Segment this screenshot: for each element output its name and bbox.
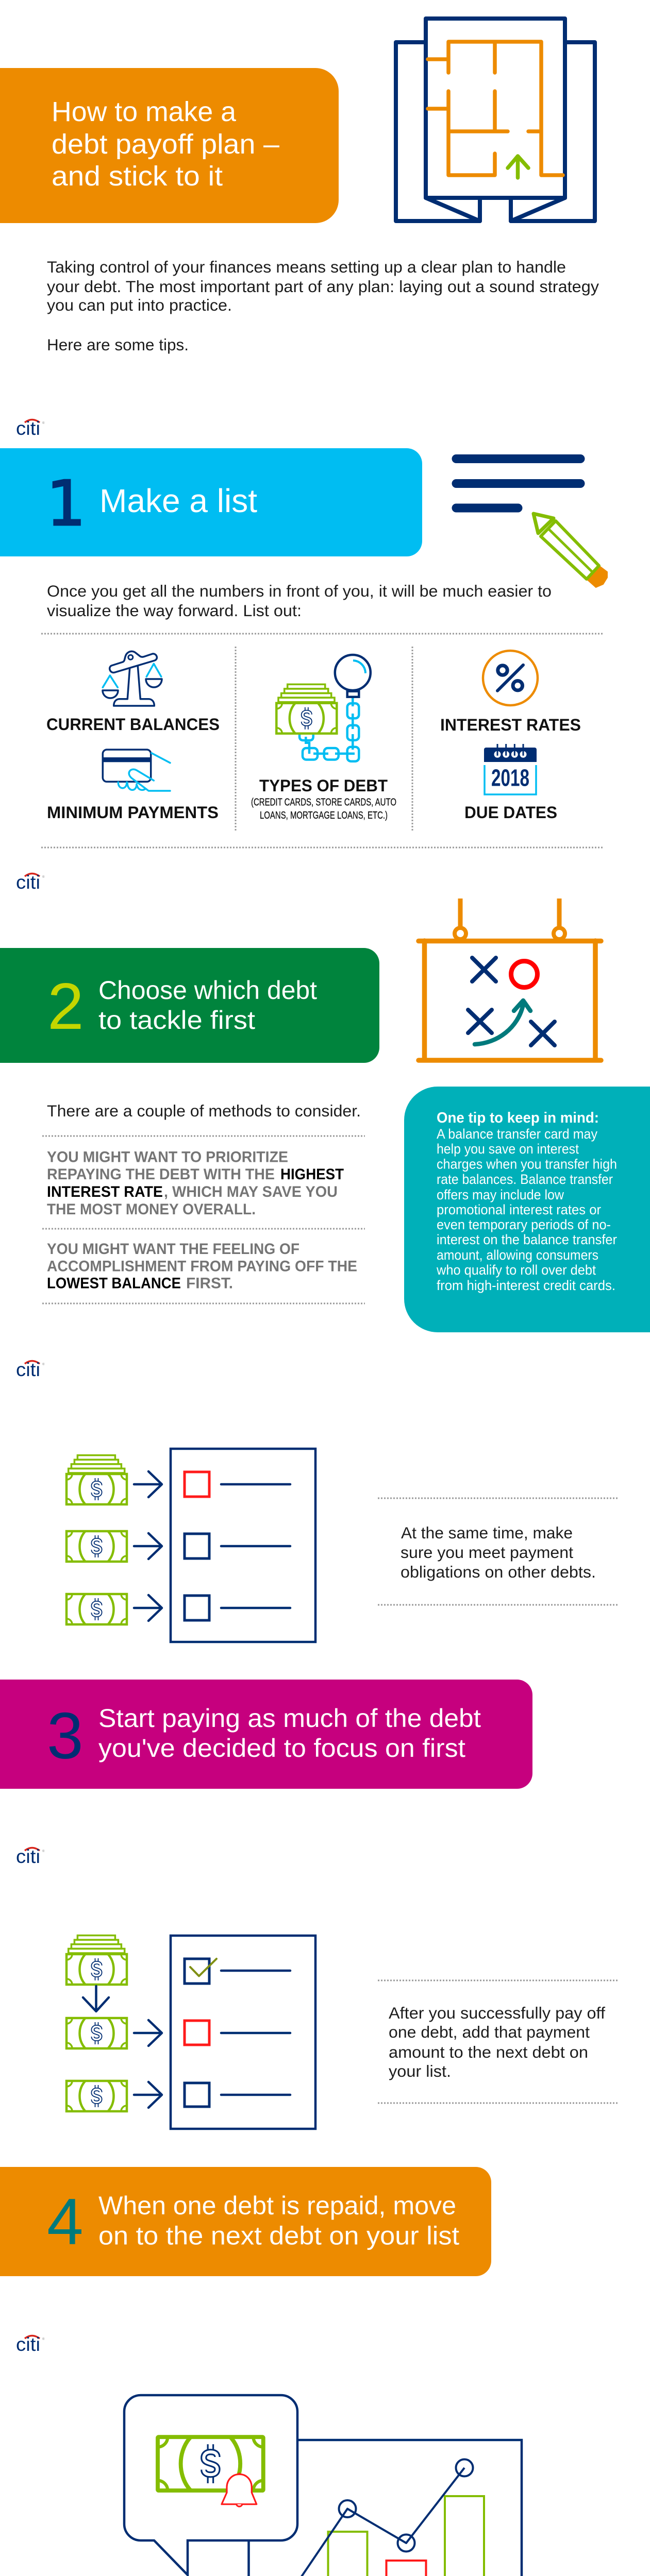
icon: credit card in hand [103, 750, 170, 791]
label: types of debt: TYPES OF DEBT [259, 776, 388, 795]
text: other debts [401, 1523, 596, 1581]
text: other debts: obligations on other debts. [401, 1563, 596, 1581]
trend line [280, 2460, 473, 2576]
intro text: Taking control of your finances means setting up a clear plan to handle [47, 258, 566, 276]
panel: tip to keep in mind [404, 1087, 650, 1332]
text: highest interest rate method: , WHICH MAY SAVE YOU [164, 1183, 338, 1200]
logo: citi: citi [16, 2334, 40, 2355]
text: highest interest rate method: INTEREST RATE [47, 1183, 163, 1200]
icon: chart with reminder bubble [124, 2395, 522, 2576]
text: other debts: At the same time, make [401, 1523, 573, 1542]
section 4 banner: on to the next debt on your list [98, 2222, 459, 2250]
panel: tip to keep in mind: amount, allowing consumers [437, 1247, 598, 1263]
speech bubble [124, 2395, 297, 2575]
label: types of debt: (CREDIT CARDS, STORE CARDS, AUTO [251, 796, 396, 808]
title banner [0, 68, 339, 223]
text: lowest balance method: FIRST. [186, 1275, 233, 1292]
text: add payment to next debt [389, 2004, 605, 2080]
section 2 banner: Choose which debt [98, 976, 317, 1005]
text: add payment to next debt: After you successfully pay off [389, 2004, 605, 2022]
title banner: debt payoff plan – [52, 129, 279, 160]
money bill [65, 1593, 128, 1626]
panel: tip to keep in mind: even temporary periods of no- [437, 1217, 611, 1232]
text: lowest balance method: YOU MIGHT WANT THE FEELING OF [47, 1241, 299, 1258]
section 1 intro text [47, 582, 552, 620]
text: lowest balance method: ACCOMPLISHMENT FROM PAYING OFF THE [47, 1258, 357, 1275]
panel: tip to keep in mind: promotional interest rates or [437, 1202, 601, 1217]
label: current balances: CURRENT BALANCES [46, 715, 220, 734]
panel: tip to keep in mind: who qualify to roll over debt [436, 1262, 596, 1278]
section 3 banner: 3 [47, 1699, 84, 1772]
text: add payment to next debt: one debt, add that payment [389, 2023, 590, 2041]
icon: calendar 2018: 2018 [491, 765, 529, 791]
logo: citi: citi [16, 418, 40, 439]
money bill [156, 2435, 265, 2493]
arrows [83, 1986, 162, 2108]
text: lowest balance method [47, 1241, 357, 1292]
icon: calendar 2018 [484, 744, 537, 794]
intro text [47, 258, 599, 354]
section 2 banner: to tackle first [98, 1006, 255, 1035]
panel: tip to keep in mind: charges when you transfer high [437, 1156, 617, 1172]
logo: citi: ® [42, 421, 45, 425]
money stack [66, 1455, 127, 1510]
text: methods intro: There are a couple of methods to consider. [47, 1101, 361, 1120]
logo: citi: ® [42, 1850, 45, 1853]
intro text: your debt. The most important part of any plan: laying out a sound strategy [47, 277, 599, 296]
section 4 banner: When one debt is repaid, move [98, 2191, 456, 2220]
label: due dates: DUE DATES [464, 803, 557, 822]
panel: tip to keep in mind: A balance transfer card may [437, 1126, 597, 1142]
icon: money chained to ball [276, 655, 371, 761]
money bill [65, 1530, 128, 1563]
logo: citi: citi [16, 872, 40, 893]
text: highest interest rate method: THE MOST MONEY OVERALL. [47, 1201, 256, 1218]
text: highest interest rate method: REPAYING THE DEBT WITH THE [47, 1166, 275, 1183]
section 1 banner: Make a list [99, 482, 257, 519]
label: minimum payments: MINIMUM PAYMENTS [47, 803, 219, 822]
text: highest interest rate method: HIGHEST [280, 1166, 344, 1183]
money stack [66, 1936, 127, 1990]
section 2 banner: 2 [47, 970, 84, 1043]
logo: citi: ® [42, 1363, 45, 1366]
panel: tip to keep in mind: from high-interest credit cards. [437, 1278, 615, 1293]
checklist document [171, 1936, 315, 2129]
label: types of debt: LOANS, MORTGAGE LOANS, ETC.) [260, 810, 388, 821]
label: types of debt [251, 776, 396, 821]
section 4 banner: 4 [47, 2185, 84, 2258]
panel: tip to keep in mind: help you save on interest [437, 1141, 579, 1157]
title banner: How to make a [52, 96, 237, 127]
text: lowest balance method: LOWEST BALANCE [47, 1275, 181, 1292]
panel: tip to keep in mind: offers may include low [437, 1187, 564, 1202]
icon: money to checklist, red first [66, 1449, 315, 1642]
label: interest rates: INTEREST RATES [440, 716, 581, 734]
panel: tip to keep in mind: One tip to keep in mind: [437, 1110, 599, 1126]
intro text: Here are some tips. [47, 335, 189, 354]
text: add payment to next debt: your list. [389, 2062, 451, 2080]
logo: citi: citi [16, 1359, 40, 1380]
icon: maze book [396, 19, 595, 221]
bars [328, 2496, 484, 2576]
section 3 banner: Start paying as much of the debt [98, 1704, 481, 1733]
arrows [134, 1471, 162, 1621]
panel: tip to keep in mind: rate balances. Balance transfer [437, 1172, 613, 1187]
icon: strategy board [419, 899, 601, 1060]
bell [222, 2473, 257, 2506]
text: highest interest rate method: YOU MIGHT WANT TO PRIORITIZE [47, 1149, 288, 1165]
section 4 banner [0, 2167, 491, 2276]
checklist document [171, 1449, 315, 1642]
text: highest interest rate method [47, 1149, 344, 1218]
logo: citi: citi [16, 1846, 40, 1867]
icon: scales [103, 651, 162, 706]
title banner: and stick to it [52, 161, 223, 192]
icon: list and pencil [456, 459, 607, 587]
icon: percent [483, 651, 538, 705]
section 3 banner: you've decided to focus on first [98, 1734, 465, 1762]
logo: citi: ® [42, 2337, 45, 2341]
panel: tip to keep in mind: interest on the balance transfer [437, 1232, 617, 1247]
section 3 banner [0, 1680, 532, 1789]
section 2 banner [0, 948, 379, 1063]
money bill [65, 2079, 128, 2112]
text: add payment to next debt: amount to the next debt on [389, 2043, 588, 2061]
money bill [65, 2016, 128, 2049]
icon: money to checklist, first checked [66, 1936, 315, 2129]
text: other debts: sure you meet payment [401, 1543, 573, 1562]
section 1 banner: 1 [46, 468, 86, 540]
logo: citi: ® [42, 875, 45, 879]
section 1 banner [0, 448, 422, 556]
section 1 intro text: visualize the way forward. List out: [47, 601, 302, 620]
chart frame [248, 2440, 522, 2576]
section 1 intro text: Once you get all the numbers in front of you, it will be much easier to [47, 582, 552, 600]
intro text: you can put into practice. [47, 296, 232, 314]
